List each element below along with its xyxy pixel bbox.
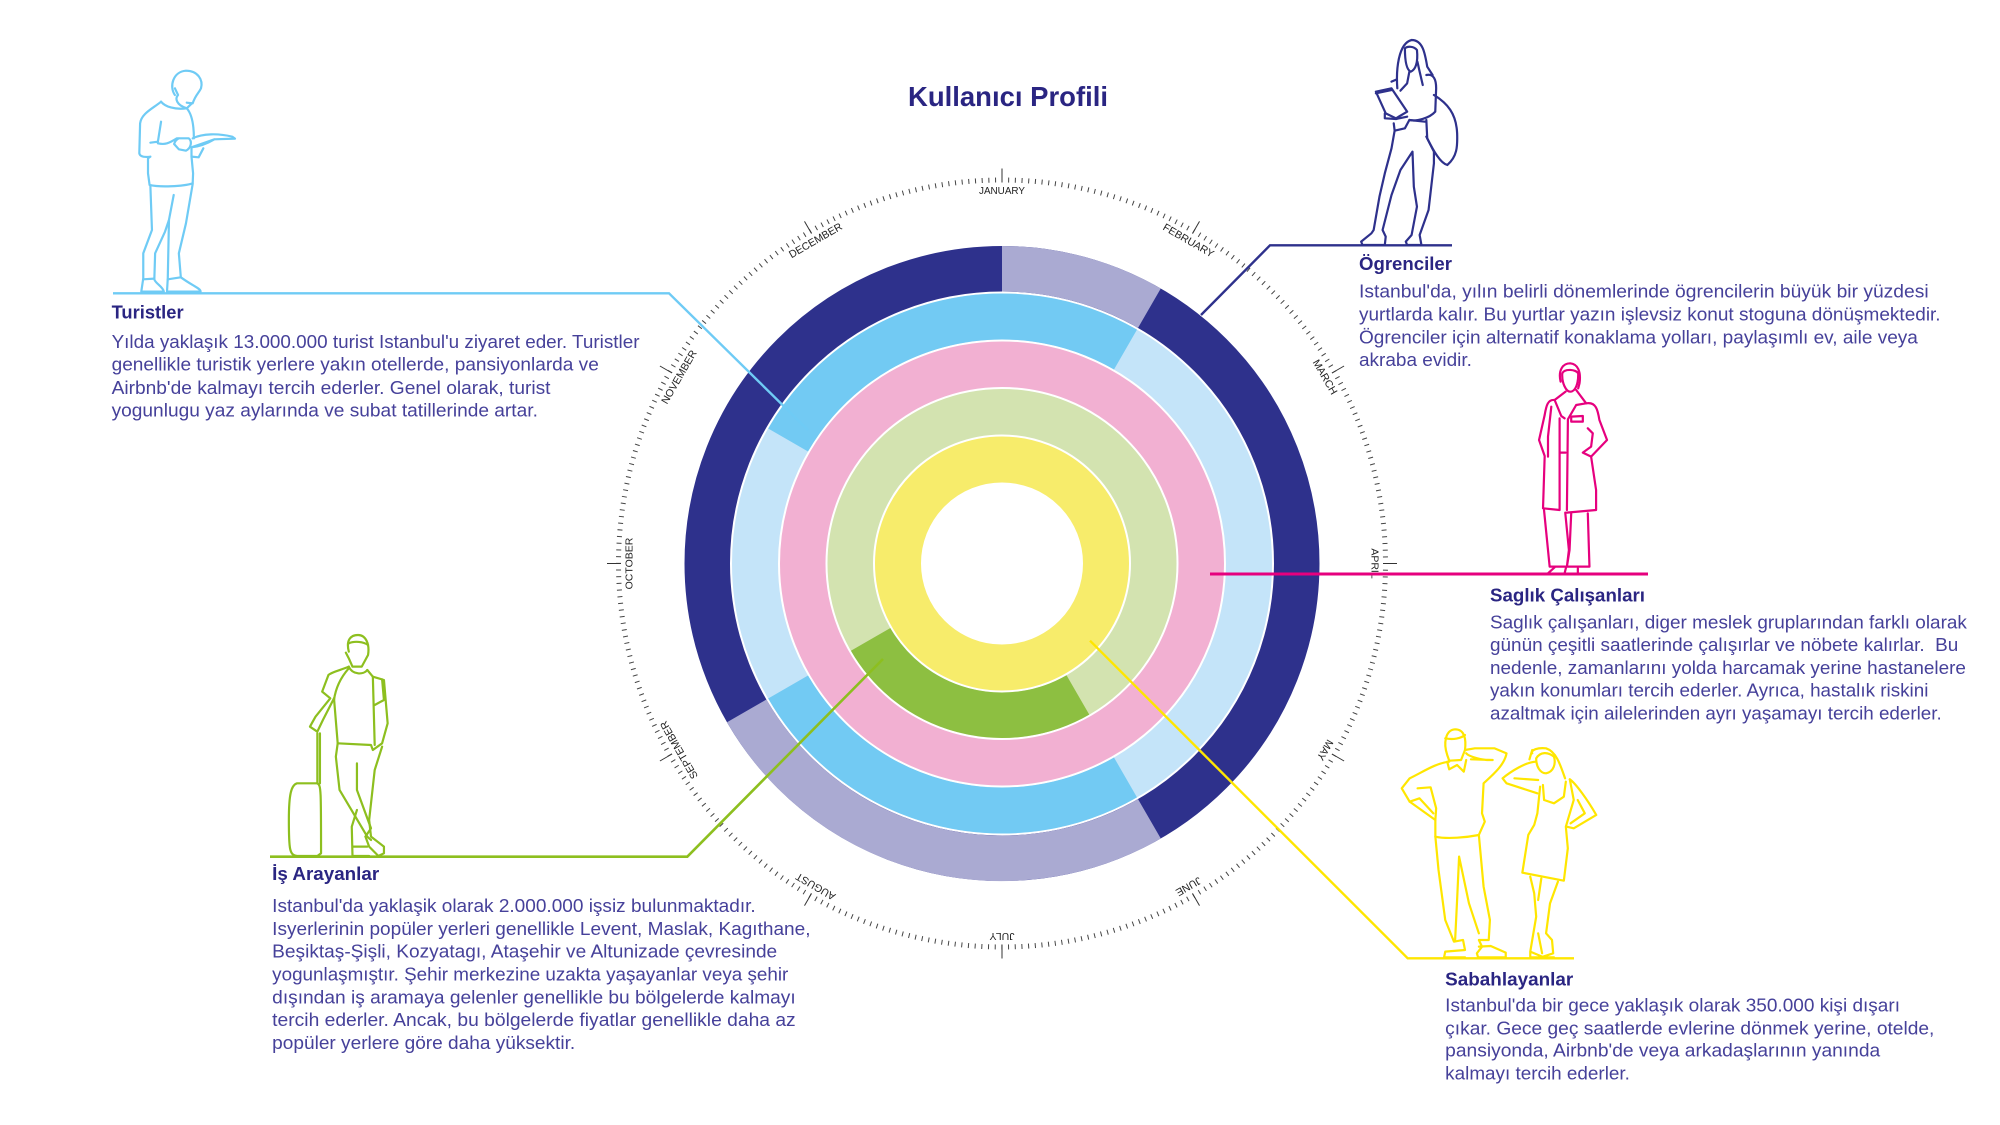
- icon: tourist reading: [139, 71, 235, 292]
- heading: öğrenciler: Ögrenciler: [1359, 253, 1452, 274]
- body: sağlık çalışanları: günün çeşitli saatlerinde çalışırlar ve nöbete kalırlar. Bu: [1490, 634, 1958, 655]
- body: öğrenciler: Istanbul'da, yılın belirli dönemlerinde ögrencilerin büyük bir yüzdesi: [1359, 280, 1929, 301]
- leader line: öğrenciler: [1201, 245, 1452, 315]
- body: iş arayanlar: [272, 895, 810, 1053]
- month labels: AUGUST: [793, 870, 838, 902]
- body: sağlık çalışanları: yakın konumları tercih ederler. Ayrıca, hastalık riskini: [1490, 680, 1928, 701]
- body: turistler: Airbnb'de kalmayı tercih ederler. Genel olarak, turist: [112, 377, 550, 398]
- month labels: DECEMBER: [787, 221, 845, 261]
- body: sağlık çalışanları: [1490, 611, 1968, 723]
- heading: turistler: Turistler: [112, 302, 184, 323]
- heading: iş arayanlar: İş Arayanlar: [272, 863, 379, 884]
- leader line: iş arayanlar: [270, 659, 883, 857]
- body: iş arayanlar: dışından iş aramaya gelenler genellikle bu bölgelerde kalmayı: [272, 986, 796, 1007]
- heading: sağlık çalışanları: Saglık Çalışanları: [1490, 585, 1645, 606]
- leader line: sağlık çalışanları: [1210, 572, 1648, 576]
- body: turistler: genellikle turistik yerlere yakın otellerde, pansiyonlarda ve: [112, 354, 599, 375]
- leader line: sabahlayanlar: [1090, 641, 1574, 958]
- body: öğrenciler: yurtlarda kalır. Bu yurtlar yazın işlevsiz konut stoguna dönüşmektedir.: [1359, 304, 1941, 325]
- body: turistler: [112, 331, 640, 421]
- body: sağlık çalışanları: Saglık çalışanları, diger meslek gruplarından farklı olarak: [1490, 611, 1968, 632]
- month tick ring: [607, 168, 1397, 958]
- leader line: turistler: [113, 293, 808, 430]
- month labels: NOVEMBER: [659, 348, 700, 406]
- body: sabahlayanlar: Istanbul'da bir gece yaklaşık olarak 350.000 kişi dışarı: [1445, 995, 1900, 1016]
- body: iş arayanlar: Istanbul'da yaklaşik olarak 2.000.000 işsiz bulunmaktadır.: [272, 895, 756, 916]
- heading: sabahlayanlar: Sabahlayanlar: [1445, 969, 1573, 990]
- text block: sağlık çalışanları: [1490, 585, 1968, 723]
- icon: doctor in lab coat: [1539, 363, 1607, 573]
- body: sabahlayanlar: kalmayı tercih ederler.: [1445, 1062, 1630, 1083]
- ring: sağlık çalışanları (health workers): [803, 364, 1201, 763]
- body: öğrenciler: [1359, 280, 1941, 370]
- text block: turistler: [112, 302, 640, 421]
- body: sabahlayanlar: çıkar. Gece geç saatlerde evlerine dönmek yerine, otelde,: [1445, 1017, 1934, 1038]
- text block: iş arayanlar: [272, 863, 810, 1053]
- month labels: MAY: [1314, 737, 1335, 762]
- ring: turistler (tourists): [755, 316, 1249, 810]
- month labels: JULY: [990, 930, 1014, 942]
- body: turistler: Yılda yaklaşık 13.000.000 turist Istanbul'u ziyaret eder. Turistler: [112, 331, 640, 352]
- body: iş arayanlar: Isyerlerinin popüler yerleri genellikle Levent, Maslak, Kagıthane,: [272, 918, 810, 939]
- body: öğrenciler: Ögrenciler için alternatif konaklama yolları, paylaşımlı ev, aile veya: [1359, 326, 1919, 347]
- body: sağlık çalışanları: nedenle, zamanlarını yolda harcamak yerine hastanelere: [1490, 657, 1966, 678]
- month labels: MARCH: [1310, 358, 1339, 397]
- month labels: SEPTEMBER: [658, 718, 701, 781]
- month labels: APRIL: [1368, 548, 1380, 579]
- body: iş arayanlar: popüler yerlere göre daha yüksektir.: [272, 1032, 575, 1053]
- ring: öğrenciler (students): [707, 269, 1297, 858]
- icon: job seeker with suitcase: [289, 635, 388, 856]
- body: turistler: yogunlugu yaz aylarında ve subat tatillerinde artar.: [112, 400, 538, 421]
- body: öğrenciler: akraba evidir.: [1359, 349, 1472, 370]
- title: Kullanıcı Profili: [908, 81, 1108, 112]
- ring: sabahlayanlar (overnighters): [898, 460, 1106, 668]
- text block: öğrenciler: [1359, 253, 1941, 370]
- body: sağlık çalışanları: azaltmak için ailelerinden ayrı yaşamayı tercih ederler.: [1490, 702, 1942, 723]
- month labels: FEBRUARY: [1161, 221, 1216, 260]
- body: iş arayanlar: tercih ederler. Ancak, bu bölgelerde fiyatlar genellikle daha az: [272, 1009, 796, 1030]
- body: iş arayanlar: Beşiktaş-Şişli, Kozyatagı, Ataşehir ve Altunizade çevresinde: [272, 941, 777, 962]
- icon: student with bag: [1361, 40, 1457, 245]
- icon: couple looking around: [1402, 729, 1596, 957]
- month labels: JANUARY: [979, 185, 1025, 197]
- text block: sabahlayanlar: [1445, 969, 1934, 1083]
- body: sabahlayanlar: pansiyonda, Airbnb'de veya arkadaşlarının yanında: [1445, 1040, 1881, 1061]
- chart: annual circular occupancy rings: [607, 168, 1397, 958]
- month labels: OCTOBER: [624, 537, 636, 589]
- month labels: JUNE: [1173, 874, 1203, 898]
- ring: iş arayanlar (job seekers): [850, 412, 1154, 715]
- body: sabahlayanlar: [1445, 995, 1934, 1083]
- body: iş arayanlar: yogunlaşmıştır. Şehir merkezine uzakta yaşayanlar veya şehir: [272, 963, 788, 984]
- month labels: [624, 185, 1380, 942]
